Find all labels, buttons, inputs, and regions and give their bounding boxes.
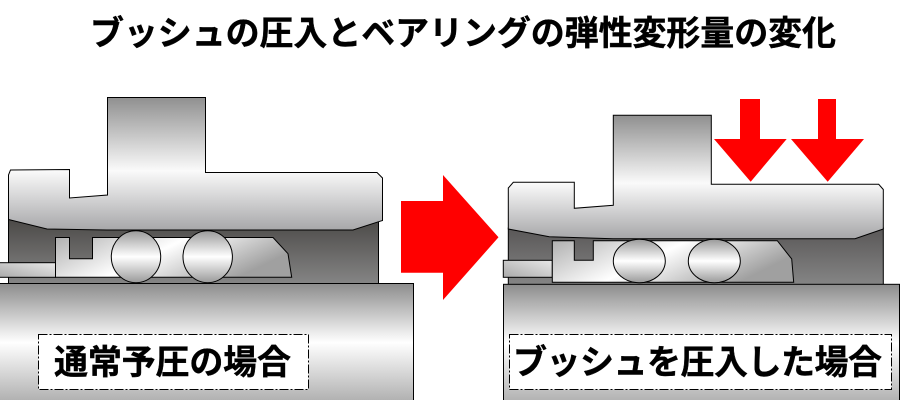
retainer tab (right) (503, 260, 552, 277)
rolling ball 2 (right) (688, 239, 740, 283)
outer ring (right) (508, 115, 883, 239)
panel: bush press-fit (503, 115, 900, 400)
outer ring (left) (8, 98, 382, 230)
label: bush press-fit: ブッシュを圧入した場合 (513, 343, 882, 382)
title: ブッシュの圧入とベアリングの弾性変形量の変化 (90, 14, 836, 53)
rolling ball 1 (left) (111, 231, 161, 283)
shaft (left) (0, 284, 414, 400)
retainer (right) (552, 241, 794, 282)
arrow: press force 2 (791, 99, 864, 182)
label: normal preload: 通常予圧の場合 (54, 344, 291, 382)
arrow: press force 1 (714, 99, 787, 182)
label: bush press-fit (510, 334, 892, 390)
retainer (left) (56, 238, 292, 277)
rolling ball 2 (left) (183, 231, 232, 283)
housing (right) (508, 228, 883, 285)
label: normal preload (38, 334, 308, 390)
housing (left) (8, 219, 378, 284)
arrow: transition (401, 175, 498, 300)
panel: normal preload (0, 98, 414, 400)
rolling ball 1 (right) (613, 239, 665, 283)
retainer tab (left) (0, 263, 56, 277)
shaft (right) (504, 284, 900, 400)
